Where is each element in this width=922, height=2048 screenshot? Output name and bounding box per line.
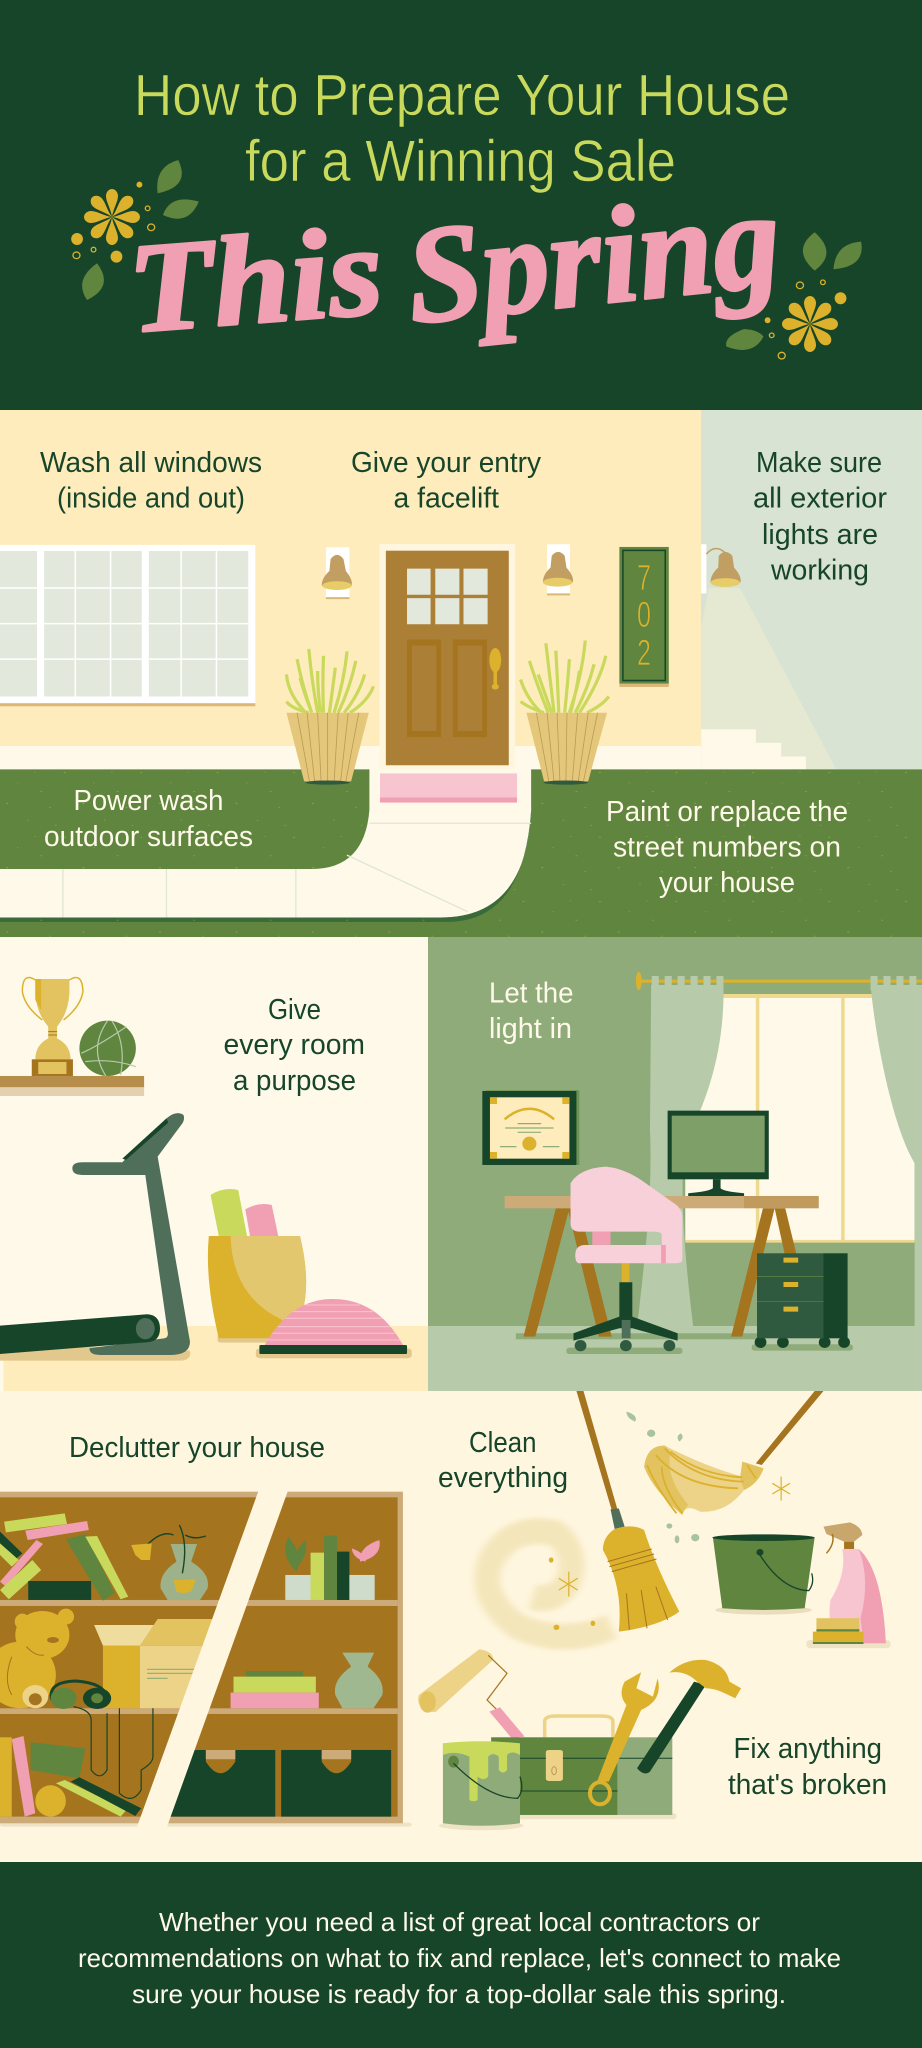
icon: left flower and leaves (71, 160, 199, 300)
footer text: sure your house is ready for a top-dollar sale this spring. (132, 1979, 786, 2009)
wall lamp right (701, 544, 741, 593)
drops (647, 1430, 699, 1543)
bookcase frame (0, 1492, 412, 1827)
footer text: recommendations on what to fix and replace, let's connect to make (78, 1943, 841, 1973)
label: let the light in: Let the (489, 978, 574, 1010)
icon: right flower and leaves (726, 232, 862, 359)
panel: house exterior (0, 410, 922, 938)
label: entry facelift: a facelift (394, 483, 499, 515)
panel: header (0, 0, 922, 410)
light cone and steps (701, 588, 836, 770)
label: fix anything: Fix anything (734, 1733, 882, 1765)
label: declutter: Declutter your house (69, 1432, 325, 1464)
water drops (626, 1412, 683, 1442)
label: give every room a purpose: a purpose (233, 1065, 356, 1097)
number digits (637, 557, 651, 673)
label: street numbers: your house (659, 867, 795, 899)
books bottom left (0, 1736, 141, 1817)
label: let the light in (489, 978, 574, 1045)
label: clean everything: Clean (469, 1427, 536, 1459)
heading: this spring (123, 162, 787, 360)
label: street numbers (606, 796, 848, 899)
label: power wash: Power wash (74, 785, 224, 817)
wrench (590, 1672, 659, 1804)
headphones (51, 1681, 153, 1798)
heading: how to prepare: for a Winning Sale (245, 129, 676, 194)
house wall (0, 410, 701, 746)
dust swirl (487, 1531, 612, 1637)
paint can (439, 1741, 523, 1830)
heading: this spring: Spring (399, 162, 787, 353)
mop (644, 1391, 823, 1515)
label: wash windows: (inside and out) (57, 483, 245, 515)
number digits: 7 (637, 557, 651, 598)
planter with rolled mats (208, 1189, 306, 1343)
label: fix anything (728, 1733, 887, 1801)
window (0, 545, 255, 706)
paint roller (418, 1649, 525, 1738)
wall lamp centre (543, 544, 573, 595)
heading: this spring: This (123, 199, 387, 360)
label: exterior lights (753, 447, 887, 586)
sparkles and dust specks (549, 1477, 790, 1630)
label: entry facelift: Give your entry (351, 447, 541, 479)
label: street numbers: Paint or replace the (606, 796, 848, 828)
label: power wash (44, 785, 253, 853)
curtain right (871, 976, 922, 1330)
stacked books right (231, 1671, 319, 1708)
curtain rod (636, 972, 922, 990)
chair (566, 1167, 682, 1354)
diagonal divider (136, 1490, 288, 1828)
walkway base (0, 746, 701, 938)
panel: gym room (0, 937, 428, 1391)
panel: declutter (0, 1432, 412, 1828)
ball (79, 1021, 136, 1076)
teddy bear (0, 1609, 74, 1708)
footer text (78, 1907, 841, 2009)
hammer (637, 1660, 741, 1774)
grass lawn (0, 769, 922, 938)
heading: how to prepare: How to Prepare Your House (134, 63, 790, 128)
walkway joints (63, 823, 531, 917)
label: fix anything: that's broken (728, 1769, 887, 1801)
footer text: Whether you need a list of great local contractors or (159, 1907, 760, 1937)
bucket (712, 1534, 815, 1615)
books top left (0, 1513, 128, 1601)
certificate (482, 1090, 579, 1165)
label: give every room a purpose: Give (268, 994, 321, 1026)
label: give every room a purpose (224, 994, 365, 1097)
label: entry facelift (351, 447, 541, 515)
open cardboard box (94, 1619, 213, 1708)
label: exterior lights: Make sure (756, 447, 882, 479)
curtain left (636, 976, 724, 1337)
toolbox (491, 1716, 676, 1819)
spray bottle (806, 1522, 891, 1648)
books and plants top right (285, 1536, 380, 1600)
broom (576, 1391, 679, 1632)
panel: footer (0, 1862, 922, 2048)
desk floor shadow (516, 1333, 759, 1339)
number digits: 2 (637, 632, 651, 673)
vase with drooping flowers (131, 1525, 208, 1600)
label: clean everything (438, 1427, 568, 1494)
number digits: 0 (637, 594, 651, 635)
label: exterior lights: lights are (762, 519, 878, 551)
panel: repairs (418, 1649, 887, 1830)
label: wash windows: Wash all windows (40, 447, 262, 479)
trophy (22, 978, 83, 1076)
storage bins (141, 1750, 391, 1817)
label: let the light in: light in (489, 1013, 572, 1045)
plant right (521, 641, 609, 785)
wall shelf (0, 1076, 144, 1096)
door (379, 544, 515, 769)
label: exterior lights: working (770, 554, 869, 586)
wall lamp left (322, 547, 352, 599)
label: clean everything: everything (438, 1462, 568, 1494)
vase right (335, 1653, 383, 1708)
filing cabinet (752, 1253, 853, 1351)
panel: office room (428, 937, 922, 1391)
treadmill shadow (0, 1347, 190, 1361)
label: exterior lights: all exterior (753, 483, 887, 515)
balance dome (256, 1299, 412, 1358)
monitor (668, 1111, 769, 1196)
treadmill (0, 1113, 190, 1355)
heading: how to prepare (134, 63, 790, 194)
side yard (701, 410, 922, 770)
plant left (286, 649, 374, 785)
panel: cleaning (438, 1391, 891, 1648)
house number plaque (619, 547, 669, 687)
desk (505, 1196, 819, 1337)
label: give every room a purpose: every room (224, 1029, 365, 1061)
window (685, 994, 918, 1243)
label: wash windows (40, 447, 262, 515)
doormat (380, 773, 517, 803)
label: street numbers: street numbers on (613, 832, 841, 864)
label: power wash: outdoor surfaces (44, 821, 253, 853)
